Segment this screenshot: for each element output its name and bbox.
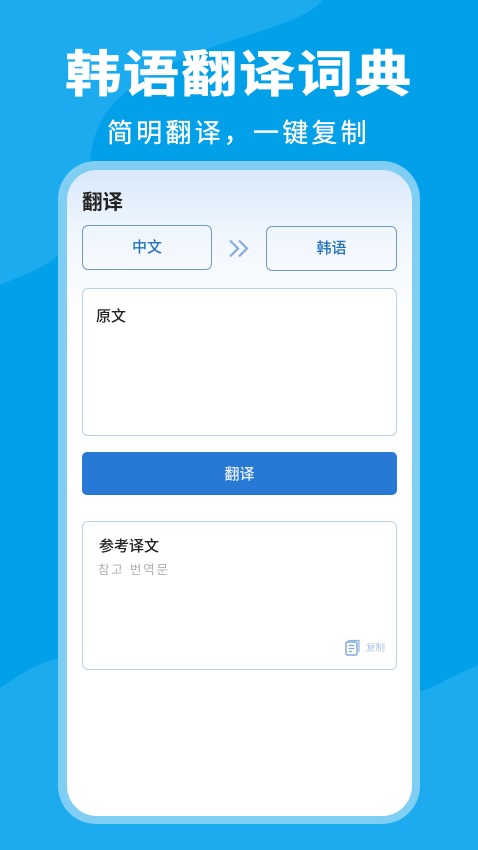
- target language button: [266, 226, 397, 271]
- source language button: [82, 225, 212, 270]
- source language button: 中文: [132, 239, 162, 256]
- copy label: 复制: [366, 643, 385, 654]
- Korean result text: 참고 번역문: [98, 563, 170, 577]
- subtitle: 简明翻译，一键复制: [107, 118, 370, 148]
- phone frame: [58, 161, 420, 824]
- target language button: 韩语: [316, 240, 346, 257]
- translate button: 翻译: [224, 466, 254, 483]
- source placeholder: 原文: [96, 308, 126, 325]
- source text box: [82, 288, 397, 436]
- screen heading: 翻译: [82, 191, 123, 214]
- title: 韩语翻译词典: [65, 47, 413, 102]
- translate button: [82, 452, 397, 495]
- icon: double chevron arrow: [229, 240, 248, 258]
- result panel: [82, 521, 397, 670]
- icon: copy: [345, 640, 360, 656]
- app screen panel: [67, 170, 412, 816]
- result heading: 参考译文: [99, 538, 159, 555]
